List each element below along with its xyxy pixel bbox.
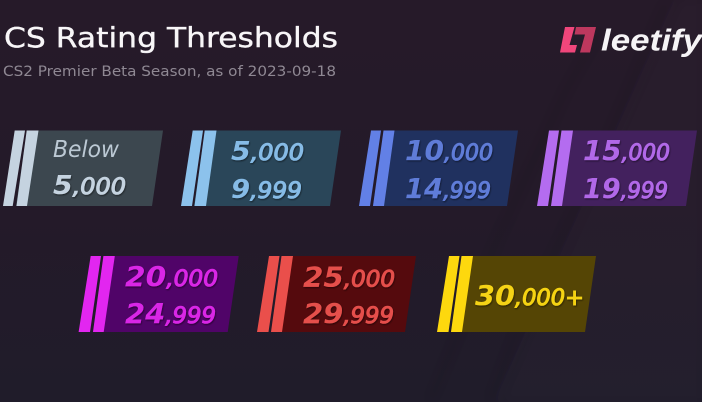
badge: below 5,000 [3,130,163,206]
title: CS Rating Thresholds [4,21,338,54]
badge: 10,000 to 14,999: 10,000 [405,134,493,167]
badge: 5,000 to 9,999: 9,999 [231,175,302,205]
badge: 15,000 to 19,999: 19,999 [583,172,668,205]
badge: 5,000 to 9,999: 5,000 [231,137,304,167]
badge: 20,000 to 24,999: 20,000 [125,260,218,293]
badge: 30,000+: 30,000+ [475,279,584,312]
badge: below 5,000: Below [53,137,119,163]
badge: 15,000 to 19,999: 15,000 [583,134,670,167]
badge: 15,000 to 19,999 [537,130,697,206]
badge: 5,000 to 9,999 [181,130,341,206]
badge: 25,000 to 29,999: 29,999 [303,297,394,330]
badge: 30,000+ [437,256,596,332]
badge: below 5,000: 5,000 [53,171,126,201]
badge: 20,000 to 24,999: 24,999 [125,297,216,330]
wordmark: leetify: leetify [601,22,702,58]
badge: 25,000 to 29,999: 25,000 [303,260,395,294]
badge: 10,000 to 14,999: 14,999 [405,172,491,205]
badge: 25,000 to 29,999 [257,256,416,332]
badge: 20,000 to 24,999 [79,256,239,332]
leetify logo [560,22,702,58]
icon: leetify mark [560,27,596,52]
subtitle: CS2 Premier Beta Season, as of 2023-09-18 [3,64,336,80]
badge: 10,000 to 14,999 [359,130,518,206]
